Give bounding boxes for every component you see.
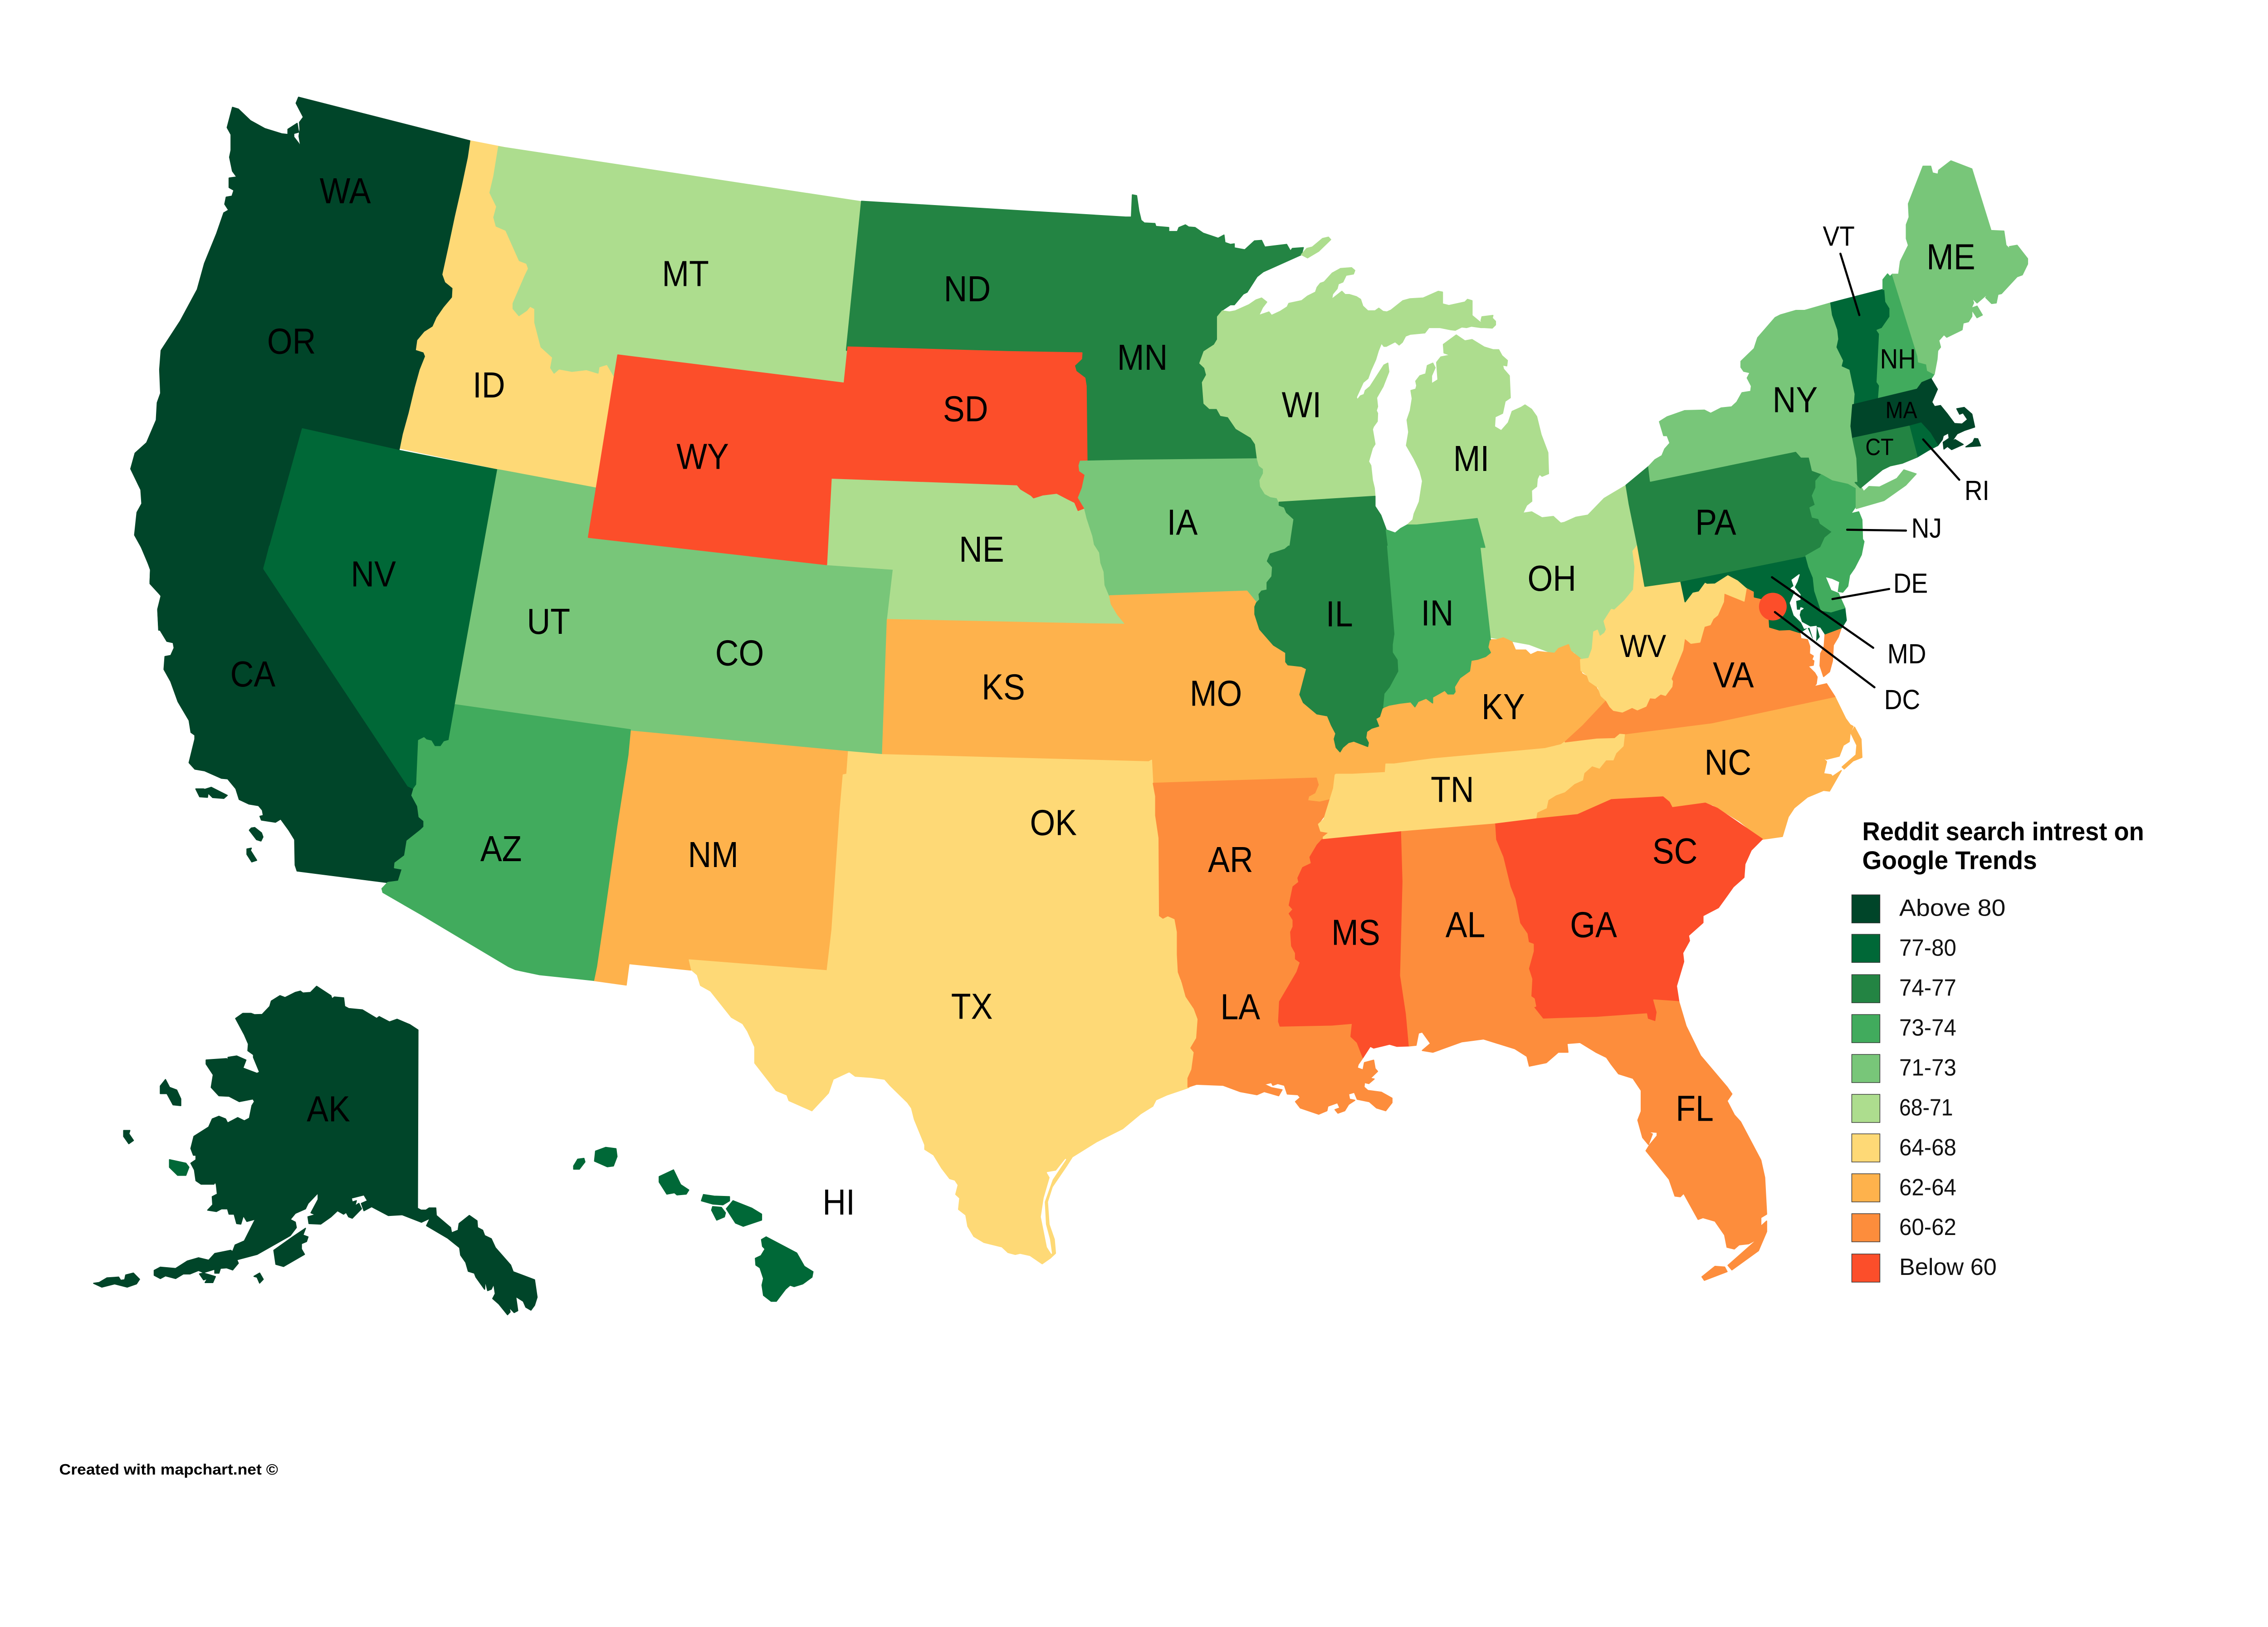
state abbreviations: ME xyxy=(1926,237,1975,277)
state: Maine xyxy=(1892,161,2028,374)
legend title: Google Trends xyxy=(1862,846,2037,875)
state abbreviations: OR xyxy=(267,321,316,362)
state abbreviations: RI xyxy=(1965,475,1989,506)
state abbreviations: WI xyxy=(1282,385,1321,425)
legend labels: 74-77 xyxy=(1899,974,1956,1000)
state abbreviations: AL xyxy=(1446,905,1485,946)
state abbreviations: OH xyxy=(1528,558,1576,599)
state abbreviations: KS xyxy=(982,667,1025,708)
state abbreviations: WA xyxy=(320,171,371,211)
state abbreviations: VT xyxy=(1823,221,1855,252)
state: Alaska xyxy=(94,986,537,1315)
legend swatches xyxy=(1852,895,1880,1282)
state: Mississippi xyxy=(1279,832,1409,1058)
state abbreviations: IL xyxy=(1326,594,1353,634)
states: Arkansas, Louisiana xyxy=(1154,778,1392,1114)
states: Oklahoma, Texas xyxy=(689,752,1198,1264)
state abbreviations: MN xyxy=(1117,337,1168,378)
legend labels xyxy=(1899,895,2005,1280)
state: Nebraska xyxy=(826,478,1125,624)
state: Virginia xyxy=(1565,587,1841,742)
state abbreviations: MT xyxy=(662,254,709,294)
legend labels: 73-74 xyxy=(1899,1014,1956,1040)
state: Idaho xyxy=(397,141,619,490)
state: Tennessee xyxy=(1319,733,1626,840)
state: Iowa xyxy=(1078,459,1296,603)
state abbreviations: AZ xyxy=(480,829,522,869)
states: South Carolina, Georgia xyxy=(1495,797,1762,1022)
state abbreviations xyxy=(230,171,1989,1223)
state abbreviations: CT xyxy=(1865,434,1894,460)
states: North Dakota, Minnesota xyxy=(846,195,1303,462)
state: West Virginia xyxy=(1580,545,1746,712)
state abbreviations: WY xyxy=(676,436,729,477)
state: New Mexico xyxy=(594,731,848,985)
states: Alabama, Florida xyxy=(1401,824,1767,1280)
state abbreviations: TX xyxy=(951,986,992,1027)
state abbreviations: NV xyxy=(351,554,396,594)
state abbreviations: ND xyxy=(944,269,991,309)
state: Illinois xyxy=(1255,496,1399,752)
state abbreviations: NM xyxy=(688,835,738,875)
state: North Carolina xyxy=(1537,696,1862,839)
legend labels: 62-64 xyxy=(1899,1174,1956,1200)
map of states xyxy=(94,97,2028,1315)
states: Michigan lower peninsula and Ohio xyxy=(1407,335,1637,660)
legend labels: 68-71 xyxy=(1899,1094,1953,1120)
state: Arizona xyxy=(382,705,631,980)
state abbreviations: LA xyxy=(1220,987,1261,1027)
legend xyxy=(1852,817,2144,1282)
state abbreviations: MI xyxy=(1453,438,1489,479)
state abbreviations: NE xyxy=(959,529,1004,570)
state: Pennsylvania xyxy=(1626,451,1832,586)
state abbreviations: ID xyxy=(473,365,505,406)
credit line: Created with mapchart.net © xyxy=(59,1461,278,1478)
state abbreviations: MS xyxy=(1331,912,1380,953)
legend title xyxy=(1862,817,2144,875)
state abbreviations: AK xyxy=(307,1089,350,1129)
state: New York xyxy=(1649,303,1916,509)
state abbreviations: GA xyxy=(1570,905,1617,946)
legend labels: 71-73 xyxy=(1899,1054,1956,1080)
states: Washington, Oregon, California xyxy=(131,97,470,882)
legend labels: 60-62 xyxy=(1899,1214,1956,1240)
state: Massachusetts xyxy=(1851,379,1980,450)
legend labels: Above 80 xyxy=(1899,895,2005,921)
state abbreviations: NJ xyxy=(1911,513,1942,544)
state abbreviations: NY xyxy=(1773,380,1818,420)
state abbreviations: DC xyxy=(1884,684,1920,715)
leader lines xyxy=(1772,254,1959,687)
state abbreviations: UT xyxy=(527,602,570,642)
state abbreviations: SD xyxy=(943,389,988,430)
state abbreviations: HI xyxy=(822,1182,855,1223)
state: Indiana xyxy=(1384,519,1491,707)
state: Rhode Island xyxy=(1909,423,1938,457)
state: Maryland xyxy=(1680,556,1846,642)
state abbreviations: KY xyxy=(1481,687,1525,727)
state abbreviations: NC xyxy=(1704,742,1751,783)
state abbreviations: VA xyxy=(1713,655,1754,696)
state: Connecticut xyxy=(1853,426,1917,488)
legend title: Reddit search intrest on xyxy=(1862,817,2144,846)
state abbreviations: PA xyxy=(1695,502,1736,543)
state abbreviations: OK xyxy=(1030,803,1077,843)
legend labels: 64-68 xyxy=(1899,1134,1956,1160)
legend labels: 77-80 xyxy=(1899,934,1956,961)
state abbreviations: SC xyxy=(1652,831,1697,872)
state: Vermont xyxy=(1831,289,1890,403)
state abbreviations: CO xyxy=(715,633,764,674)
state abbreviations: MA xyxy=(1886,397,1917,423)
states: Wyoming, South Dakota xyxy=(588,347,1087,564)
state abbreviations: AR xyxy=(1208,840,1253,880)
states: Wisconsin and Michigan upper peninsula xyxy=(1200,237,1496,502)
state: District of Columbia xyxy=(1759,593,1787,621)
state abbreviations: CA xyxy=(230,654,276,695)
state abbreviations: IA xyxy=(1167,502,1198,543)
state: Montana xyxy=(490,147,861,383)
state abbreviations: WV xyxy=(1620,628,1667,664)
state abbreviations: MD xyxy=(1887,638,1926,670)
state abbreviations: NH xyxy=(1880,343,1916,375)
state abbreviations: FL xyxy=(1676,1088,1714,1129)
state abbreviations: DE xyxy=(1893,568,1928,599)
state abbreviations: IN xyxy=(1421,593,1453,634)
state: New Hampshire xyxy=(1877,274,1934,399)
states: Kansas, Missouri, Kentucky xyxy=(883,591,1606,802)
water: Chesapeake Bay xyxy=(1790,575,1816,642)
states: Utah, Colorado xyxy=(455,470,893,755)
states: New Jersey, Delaware xyxy=(1806,474,1864,612)
state abbreviations: TN xyxy=(1431,769,1474,810)
state: Hawaii xyxy=(574,1147,813,1301)
legend labels: Below 60 xyxy=(1899,1254,1997,1280)
state: Nevada xyxy=(264,429,498,789)
state abbreviations: MO xyxy=(1190,673,1242,714)
